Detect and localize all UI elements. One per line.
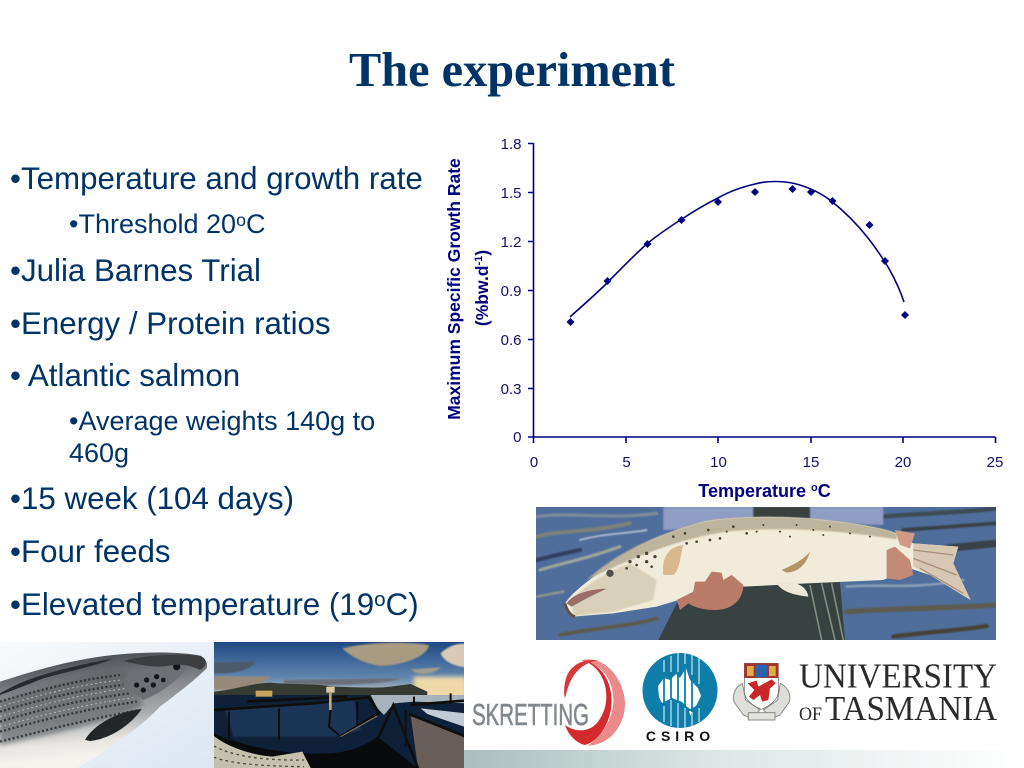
fish back shading [587,517,897,580]
logo stripes [664,665,692,712]
sign [326,687,335,693]
x tick labels: 15 [803,454,819,471]
y tick labels: 1.5 [501,185,522,202]
fish body [565,517,971,617]
y tick labels: 1.8 [501,136,522,153]
photo: salmon on ice [0,642,214,768]
x tick labels: 5 [622,454,631,471]
y axis title: ) [472,250,492,256]
data points [566,185,909,326]
sub-bullet: threshold: •Threshold 20oC [69,209,265,239]
y tick labels: 1.2 [501,234,522,251]
growth rate chart [444,136,1003,501]
crest [733,663,790,720]
scale pattern [0,675,140,742]
x tick labels: 0 [530,454,538,471]
logo wordmark: CSIRO [646,728,715,744]
sub-bullet: weights: •Average weights 140g to [69,406,375,436]
spots [625,524,871,570]
bullet: feeds: •Four feeds [10,534,171,569]
head shading [572,563,657,616]
x tick labels: 20 [895,454,911,471]
angler's shirt [663,507,883,530]
head top [123,655,206,670]
scale shadow [0,672,143,745]
bullet: elevated temperature: •Elevated temperature (19oC) [10,587,419,622]
sub-bullet: weights [69,406,375,468]
y tick labels: 0.9 [501,283,522,300]
logo: University of Tasmania [733,658,997,728]
photo: hands holding a large trout [536,507,997,640]
y axis title: (%bw.d [472,266,492,326]
walkway tan rail [341,716,377,737]
y tick labels: 0 [513,429,522,446]
coiled rope [214,736,311,768]
logo wordmark: SKRETTING [472,697,589,732]
footer gradient band [464,750,1024,768]
x tick labels [530,454,1003,471]
x tick labels: 10 [710,454,727,471]
horizon glow [414,677,466,700]
logo swoosh [564,659,625,746]
gill cover [132,670,186,700]
title: The experiment [349,44,675,97]
bullet list [10,161,423,622]
photo: sea cages at sunset [214,640,466,768]
fins [663,545,683,575]
y tick labels: 0.6 [501,332,522,349]
x axis [534,437,996,443]
bullet: duration: •15 week (104 days) [10,481,294,516]
eye [606,570,614,577]
hand under fish [677,572,743,610]
y axis title: -1 [473,256,485,266]
head spots [134,663,180,693]
x axis title: o [811,482,818,494]
distant boat [256,691,272,697]
x tick labels: 25 [987,454,1003,471]
logo: Skretting [472,659,625,746]
clouds [214,643,466,690]
hills [214,682,428,695]
waders [658,582,845,640]
hand at tail [887,547,913,580]
y axis title: Maximum Specific Growth Rate [444,158,464,420]
pen walkways [214,697,466,768]
mouth [567,589,607,607]
salmon body [0,652,207,768]
water [214,695,466,768]
y tick labels: 0.3 [501,381,522,398]
wordmark: of: OF [799,704,822,725]
bullet: trial: •Julia Barnes Trial [10,253,261,288]
fitted curve [570,182,904,317]
x axis title: C [818,481,831,501]
pectoral fin [85,709,142,741]
x axis title: Temperature [698,481,806,501]
foreground dark deck [214,733,417,768]
tail [913,543,971,600]
y axis [528,143,534,437]
wordmark: tasmania: TASMANIA [825,690,997,728]
sub-bullet: weights: 460g [69,438,129,468]
bullet: ratios: •Energy / Protein ratios [10,306,331,341]
logo Australia map [658,668,701,709]
wordmark: university: UNIVERSITY [799,658,997,696]
bullet: salmon: • Atlantic salmon [10,358,240,393]
logo disc [642,653,718,728]
water streaks [537,508,997,637]
bullet: temperature: •Temperature and growth rate [10,161,423,196]
y tick labels [501,136,522,446]
logo: CSIRO [642,653,718,744]
salmon dorsal dark stripe [0,658,113,695]
y axis title [444,158,492,420]
